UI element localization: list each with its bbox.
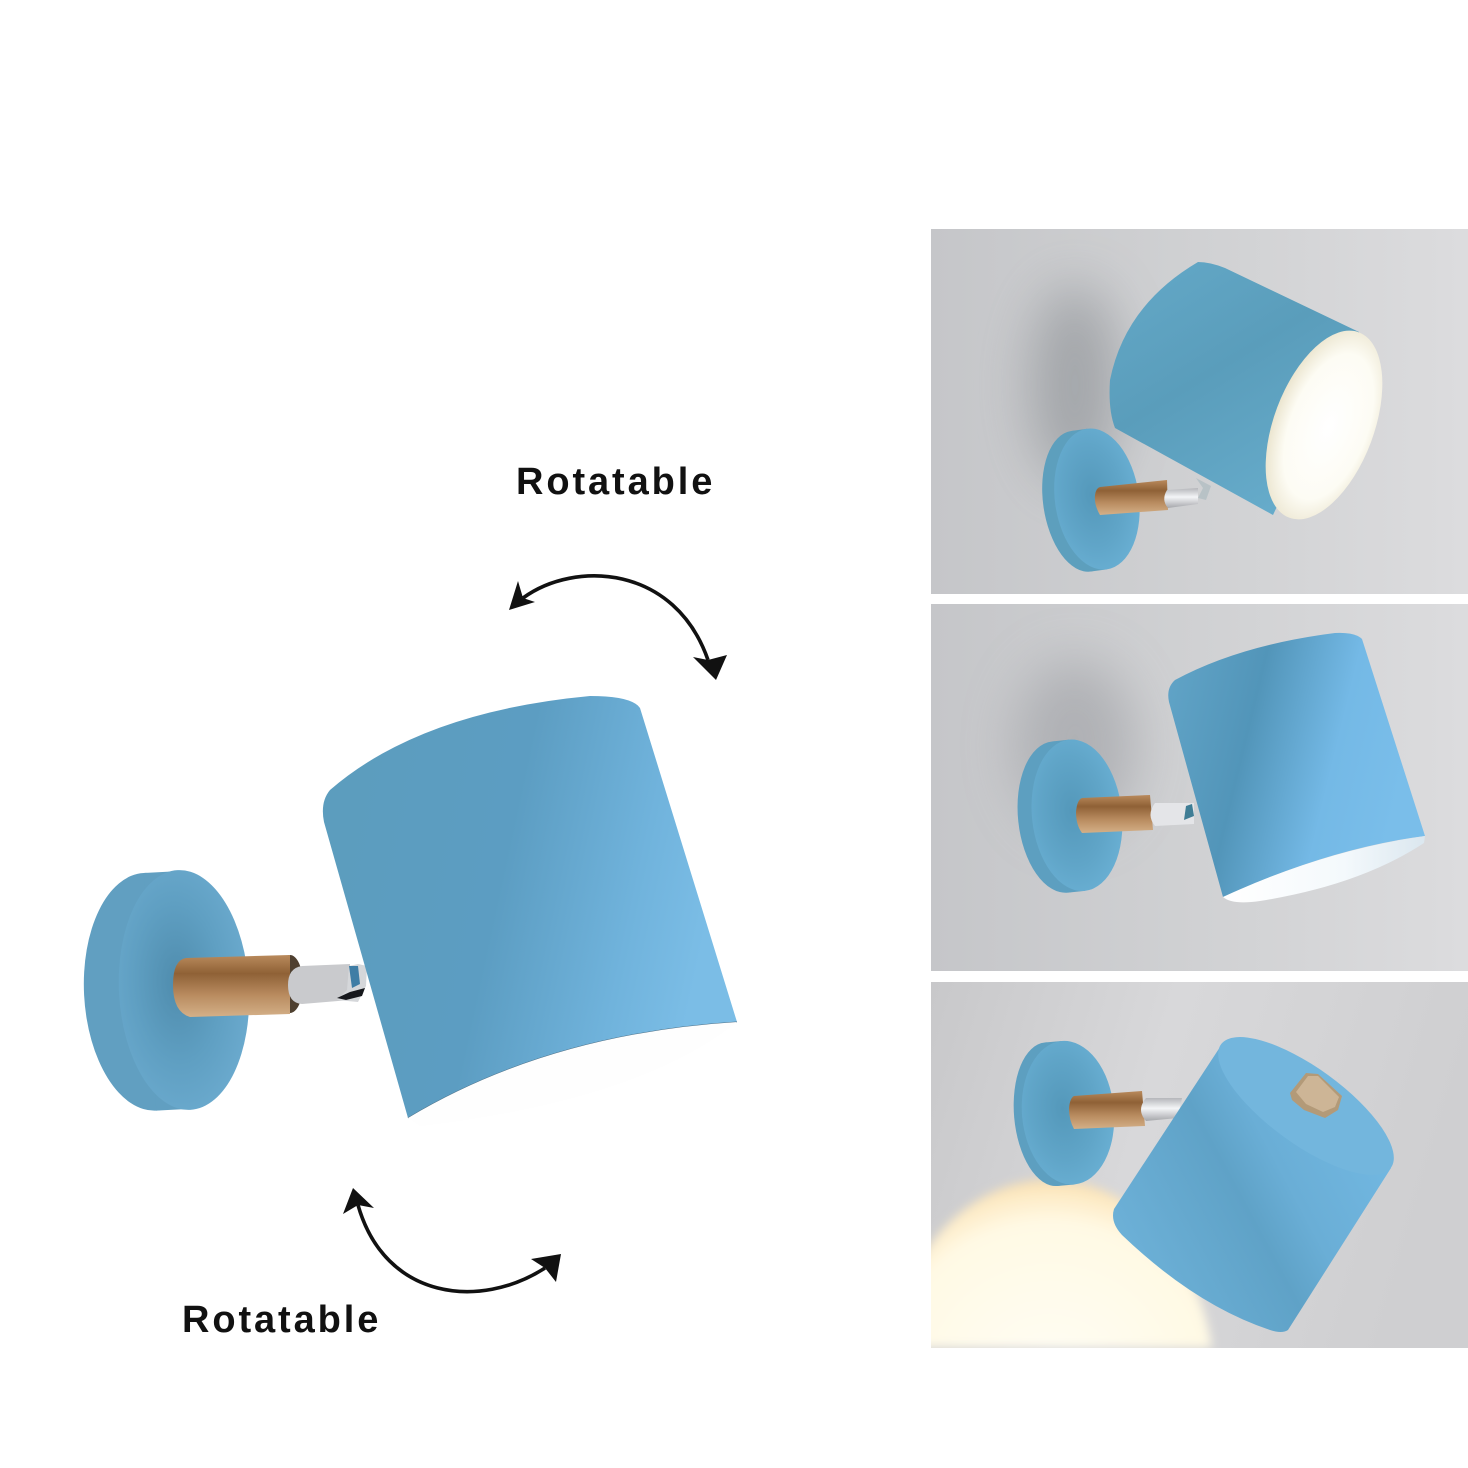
panel: lamp pointing down — [931, 604, 1468, 971]
panel: lamp pointing up — [931, 229, 1468, 594]
icon: lamp shade — [323, 696, 737, 1126]
icon: wood arm — [1076, 795, 1153, 833]
icon: mount disc — [1014, 1040, 1114, 1186]
panel: lamp lit from below — [888, 982, 1468, 1348]
warm light glow — [931, 1176, 1214, 1348]
icon: wooden knob — [1290, 1073, 1342, 1118]
arrow: bottom curved rotation arrow — [343, 1188, 561, 1292]
icon: shade — [1168, 633, 1425, 902]
icon: metal joint — [1164, 478, 1211, 508]
icon: mount disc — [1018, 740, 1122, 893]
label: top Rotatable: Rotatable — [516, 461, 715, 503]
icon: shade — [1113, 1037, 1394, 1332]
icon: wood arm — [1069, 1091, 1145, 1129]
main lamp illustration — [78, 696, 737, 1126]
icon: shade — [1110, 262, 1382, 520]
label: bottom Rotatable: Rotatable — [182, 1299, 381, 1341]
icon: metal joint — [288, 964, 367, 1004]
arrow: top curved rotation arrow — [509, 576, 727, 680]
icon: mount disc — [1042, 428, 1140, 572]
icon: metal joint — [1150, 803, 1194, 826]
icon: wood arm — [1095, 480, 1168, 515]
icon: wooden arm — [173, 955, 303, 1017]
icon: metal joint — [1141, 1098, 1182, 1121]
icon: wall mount disc — [78, 867, 255, 1115]
